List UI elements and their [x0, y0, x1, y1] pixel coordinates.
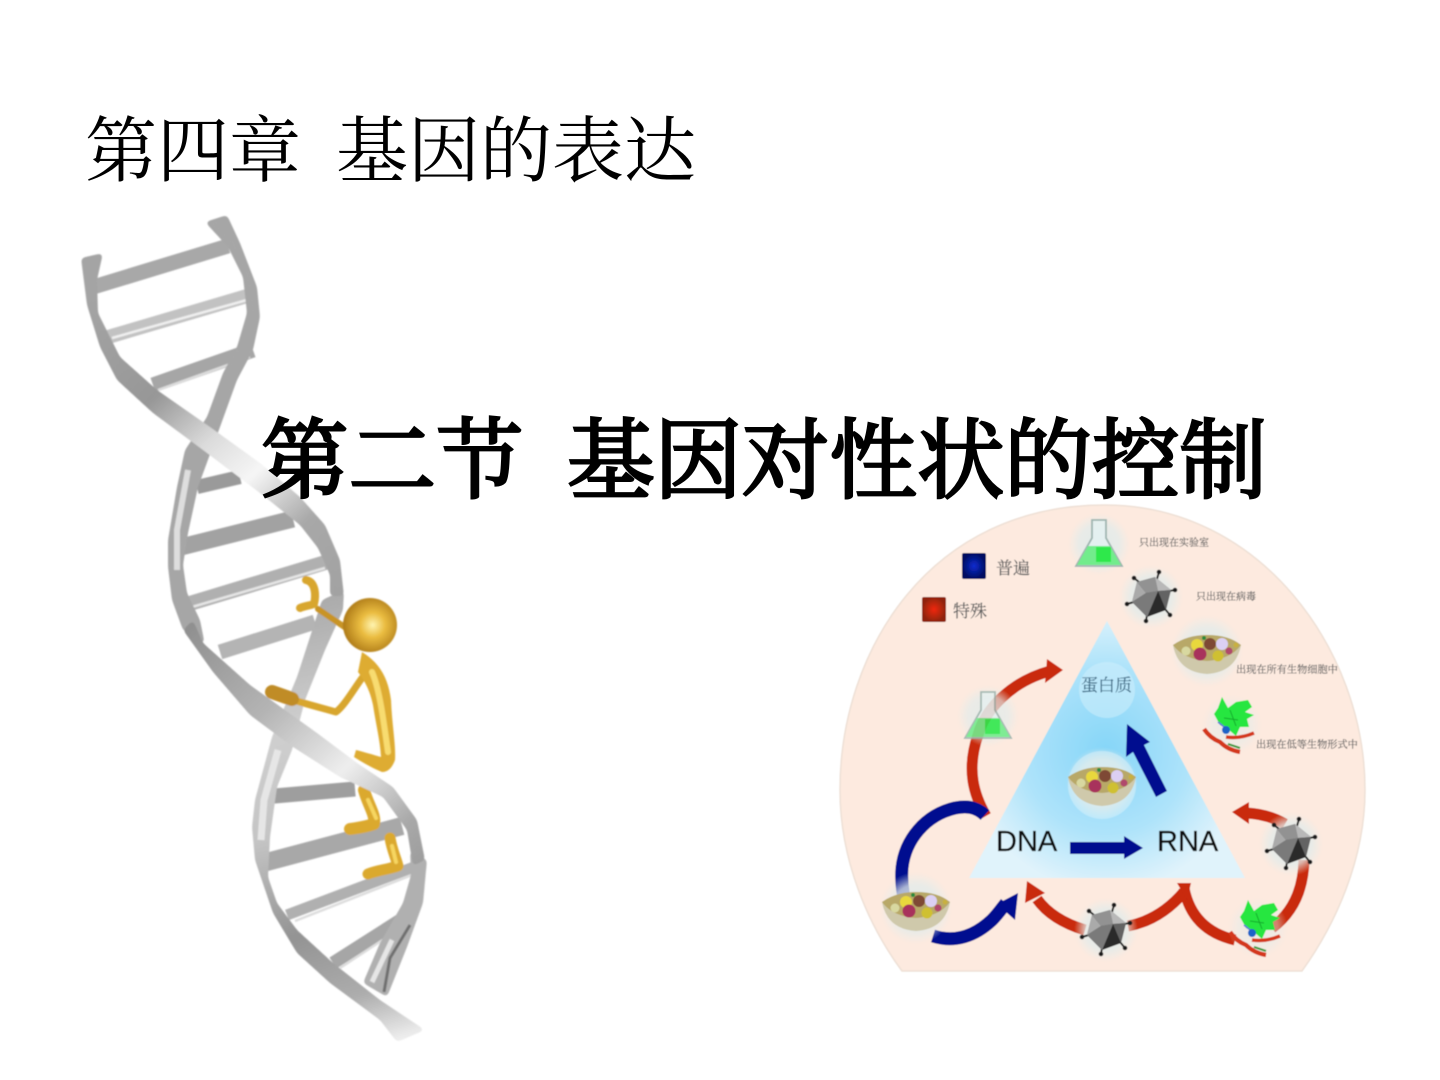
section title: 第二节 — [261, 413, 524, 510]
section title: 基因对性状的控制 — [567, 413, 1267, 510]
triangle glow: bowl — [1068, 751, 1136, 819]
label: DNA: DNA — [996, 826, 1058, 858]
blue arc arrow: DNA self replication — [902, 807, 1018, 939]
icon: flask on arrow — [957, 685, 1019, 747]
triangle glow: protein — [1079, 662, 1135, 718]
label: virus only: 只出现在病毒 — [1196, 590, 1256, 603]
icon: flask top — [1068, 513, 1130, 575]
helix rungs — [90, 246, 414, 968]
legend: special — [922, 597, 987, 622]
peach disc — [840, 505, 1365, 971]
label: RNA: RNA — [1157, 826, 1219, 858]
blue triangle — [969, 621, 1245, 878]
red arrow: RNA self replication — [1177, 802, 1304, 940]
figure upper body — [272, 580, 397, 772]
helix strand: upper back — [168, 215, 260, 645]
chapter title — [85, 112, 696, 192]
strand highlight — [177, 470, 188, 570]
red arrow: reverse transcription — [1025, 881, 1184, 930]
icon: cell bowl lower left — [880, 872, 952, 944]
figure legs — [350, 790, 398, 874]
icon: cell bowl in triangle — [1066, 747, 1138, 819]
strand highlight — [261, 750, 278, 840]
helix strand: middle front — [183, 620, 425, 866]
red arrow: RNA to protein — [972, 659, 1063, 816]
stray highlight — [372, 940, 392, 982]
legend: universal: 普遍 — [996, 559, 1030, 578]
bottom fork strand — [363, 850, 427, 997]
circular central dogma diagram — [840, 505, 1365, 971]
icon: virus top — [1119, 565, 1183, 629]
helix strand: upper front — [81, 253, 344, 596]
blue arrow: DNA to RNA — [1070, 836, 1143, 859]
upper arm and hand — [300, 580, 346, 628]
legend: universal — [962, 553, 1030, 579]
torso highlight — [372, 672, 388, 752]
label: all cells: 出现在所有生物细胞中 — [1236, 663, 1338, 676]
fork slit — [384, 925, 410, 992]
icon: plant lower right — [1228, 898, 1288, 958]
chapter title: 基因的表达 — [336, 112, 696, 192]
icon: virus bottom — [1074, 898, 1138, 962]
lower arm and hand — [272, 678, 362, 712]
label: protein: 蛋白质 — [1081, 676, 1132, 695]
label: lab only: 只出现在实验室 — [1139, 536, 1209, 549]
figure head — [343, 598, 397, 652]
section title — [261, 413, 1267, 510]
figure torso — [354, 652, 395, 772]
icon: virus right — [1259, 812, 1323, 876]
blue arrow: RNA to protein — [1126, 724, 1167, 797]
label: lower life forms: 出现在低等生物形式中 — [1256, 738, 1358, 751]
icon: plant top — [1202, 695, 1262, 755]
chapter title: 第四章 — [85, 112, 301, 192]
helix strand: lower back — [252, 590, 425, 1042]
legend: special: 特殊 — [953, 602, 987, 621]
icon: cell bowl top — [1171, 615, 1243, 687]
DNA helix with climbing figure — [81, 215, 427, 1042]
